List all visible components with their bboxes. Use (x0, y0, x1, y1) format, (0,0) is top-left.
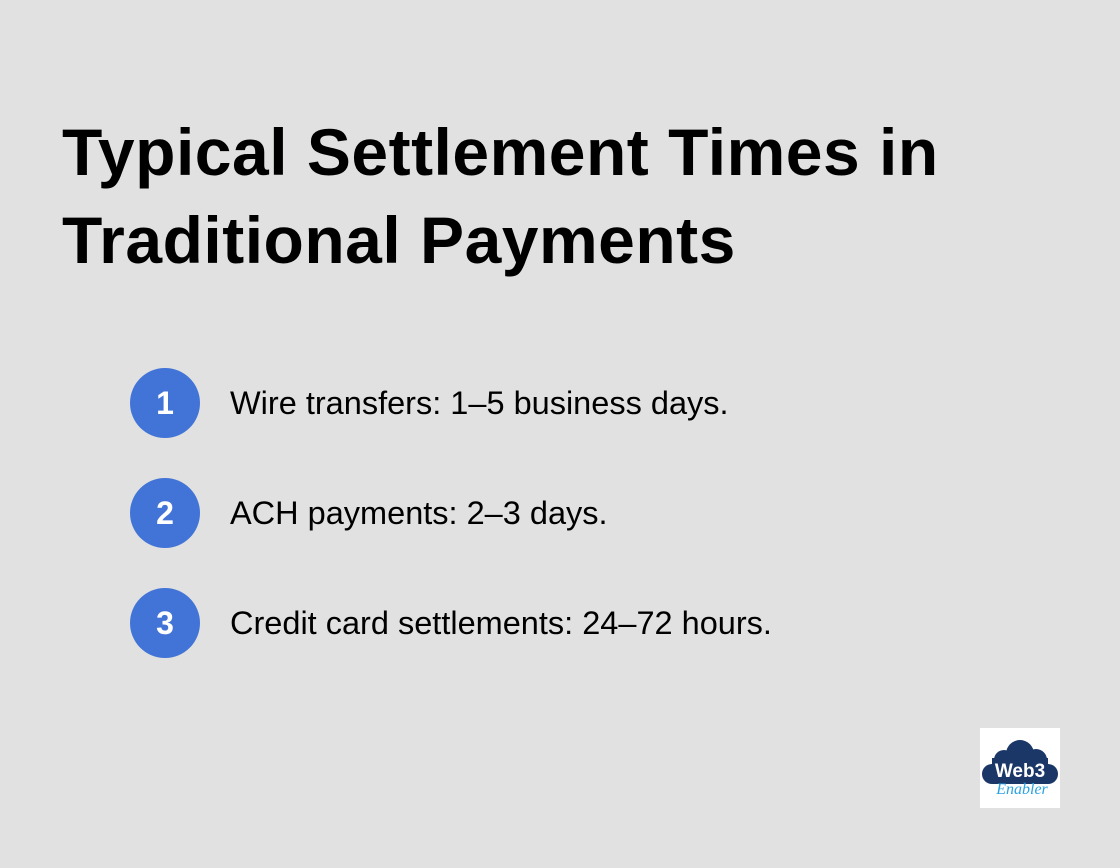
title (62, 115, 939, 277)
item 3 (130, 588, 772, 658)
badge 2 (130, 478, 200, 548)
title: Typical Settlement Times in (62, 115, 939, 189)
item 1 (130, 368, 729, 438)
badge 3: 3 (156, 605, 174, 641)
item 2 (130, 478, 608, 548)
text 2: ACH payments: 2–3 days. (230, 495, 608, 531)
badge 1 (130, 368, 200, 438)
logo: Enabler (995, 781, 1049, 798)
badge 3 (130, 588, 200, 658)
title: Traditional Payments (62, 203, 736, 277)
badge 1: 1 (156, 385, 174, 421)
logo (980, 728, 1060, 808)
text 3: Credit card settlements: 24–72 hours. (230, 605, 772, 641)
logo: Web3 (995, 761, 1045, 782)
text 1: Wire transfers: 1–5 business days. (230, 385, 729, 421)
badge 2: 2 (156, 495, 174, 531)
